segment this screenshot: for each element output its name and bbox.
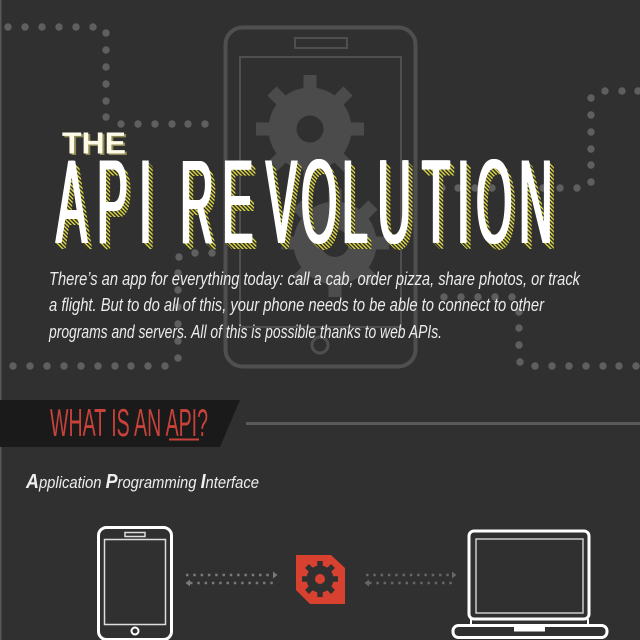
dotted circuit lines [4,23,640,370]
phone home button [312,337,328,353]
arrow: tablet to API [186,572,278,586]
small gear [281,189,389,297]
banner shape [0,400,240,447]
section banner: what is an API [0,400,240,447]
title words: API REVOLUTION: APIREVOLUTION [57,136,554,269]
title word: THE: THE [64,127,128,162]
title [55,126,558,275]
title words: API REVOLUTION: APIREVOLUTION [56,136,553,269]
icon: tablet [98,528,172,640]
phone outline [226,28,416,366]
API underline [169,438,199,440]
title words: API REVOLUTION: APIREVOLUTION [58,139,555,272]
icon: laptop [453,531,607,638]
acronym definition: Application Programming Interface [25,471,259,493]
background phone illustration [226,28,416,366]
title word: THE: THE [62,126,126,160]
banner heading: WHAT IS AN API? [50,402,208,445]
intro paragraph: a flight. But to do all of this, your phone needs to be able to connect to other [49,295,545,315]
phone speaker [295,38,347,48]
arrow: API to laptop [364,572,456,586]
large gear [256,75,364,183]
intro paragraph [48,269,581,342]
intro paragraph: programs and servers. All of this is possible thanks to web APIs. [48,322,442,342]
title words: API REVOLUTION: APIREVOLUTION [59,140,556,273]
title words: API REVOLUTION: APIREVOLUTION [56,137,553,270]
title words: API REVOLUTION: APIREVOLUTION [61,142,558,275]
title words: API REVOLUTION: APIREVOLUTION [57,138,554,271]
title words: API REVOLUTION: APIREVOLUTION [55,136,552,269]
phone screen [240,57,401,327]
title words: API REVOLUTION: APIREVOLUTION [60,141,557,274]
icon: API gear badge [296,555,345,604]
